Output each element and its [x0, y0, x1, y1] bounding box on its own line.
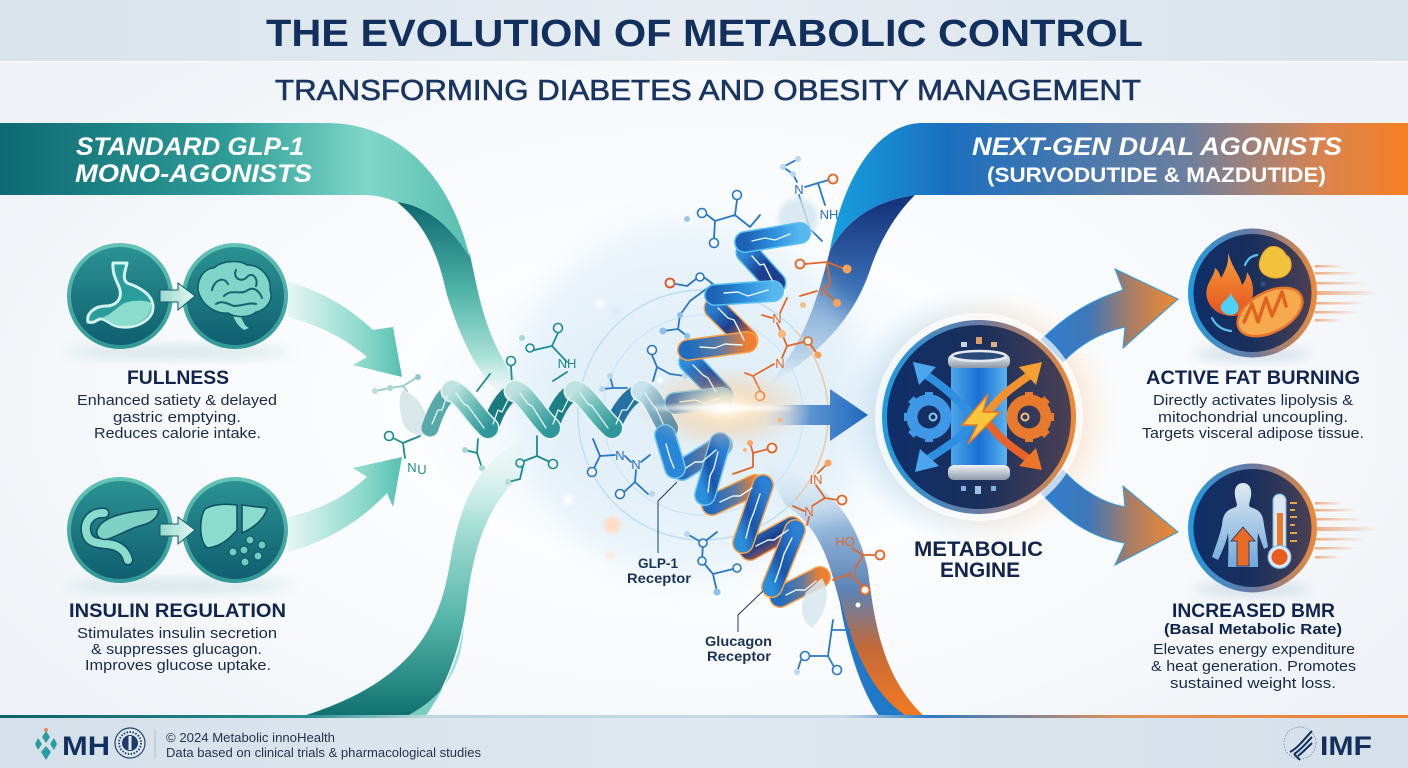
text: active fat burning: Directly activates lipolysis &	[1153, 393, 1353, 409]
icon: lightning bolt	[962, 394, 1000, 444]
icon: increased BMR	[1188, 464, 1378, 595]
molecules: orange side chains: N	[804, 504, 814, 519]
engine glow halo	[839, 289, 1120, 545]
ribbon: right banner with flowing ribbons	[765, 123, 1408, 717]
icon: flame	[1206, 252, 1253, 316]
molecules: teal side chains: NH	[558, 356, 576, 371]
molecules: blue side chains: N	[794, 182, 804, 197]
right banner heading: (SURVODUTIDE & MAZDUTIDE)	[987, 164, 1326, 187]
label: metabolic engine	[914, 538, 1043, 582]
icon: active fat burning	[1188, 228, 1378, 360]
text: active fat burning: Targets visceral adipose tissue.	[1142, 426, 1364, 442]
footer credits: Data based on clinical trials & pharmacological studies	[166, 746, 481, 760]
diagonal strands	[690, 252, 775, 395]
footer credits	[166, 731, 481, 760]
band outlines	[675, 233, 800, 403]
icon: liver with cells	[201, 504, 267, 566]
molecules: orange side chains: N	[820, 284, 830, 299]
icon: arrow between pancreas and liver	[160, 517, 195, 544]
footer	[0, 715, 1408, 768]
molecules: blue side chains: NH	[820, 207, 838, 222]
arrow: engine to increased BMR	[1041, 470, 1178, 565]
text: increased BMR	[1151, 601, 1356, 692]
title: THE EVOLUTION OF METABOLIC CONTROL	[266, 13, 1143, 55]
icon: pancreas	[86, 509, 158, 560]
text: active fat burning	[1142, 368, 1364, 442]
molecules: orange side chains: N	[772, 311, 782, 326]
molecules: teal side chains: N	[407, 460, 417, 475]
icon: arrow between stomach and brain	[160, 283, 195, 310]
text: increased BMR: (Basal Metabolic Rate)	[1164, 621, 1342, 638]
text: fullness: Enhanced satiety & delayed	[77, 393, 277, 409]
molecules: teal side chains	[372, 324, 576, 485]
icon: metabolic engine	[875, 313, 1083, 521]
text: increased BMR: & heat generation. Promotes	[1151, 659, 1356, 675]
text: active fat burning: ACTIVE FAT BURNING	[1146, 368, 1360, 389]
text: insulin regulation: & suppresses glucagon.	[91, 642, 262, 658]
helix: teal GLP-1 peptide	[400, 390, 668, 435]
left banner heading: MONO-AGONISTS	[75, 160, 312, 188]
leader line and label: GLP-1 receptor: Receptor	[627, 570, 692, 586]
text: fullness	[77, 368, 277, 442]
background glow and rings behind receptors	[515, 220, 865, 580]
text: increased BMR: Elevates energy expenditure	[1153, 642, 1355, 658]
icon: right gear	[1012, 392, 1054, 442]
header band	[0, 0, 1408, 62]
icon: insulin regulation pancreas to liver	[66, 477, 290, 592]
arrow: receptors to metabolic engine	[763, 389, 868, 441]
leader line and label: glucagon receptor: Receptor	[707, 648, 772, 664]
subtitle: TRANSFORMING DIABETES AND OBESITY MANAGEMENT	[275, 75, 1141, 107]
molecules: blue side chains	[588, 156, 850, 675]
left banner heading	[75, 133, 312, 188]
text: fullness: Reduces calorie intake.	[94, 426, 261, 442]
icon: mitochondrion	[1230, 278, 1310, 346]
icon: crossing arrows	[913, 362, 1042, 472]
ribbon: left banner with flowing ribbons	[0, 123, 527, 717]
icon: battery cylinder	[948, 337, 1010, 494]
helix: upper GLP-1 receptor	[675, 198, 818, 403]
left banner heading: STANDARD GLP-1	[76, 133, 304, 161]
leader line and label: glucagon receptor	[705, 591, 772, 664]
icon: left gear	[904, 392, 946, 442]
band outlines	[682, 445, 820, 597]
icon: fat droplet	[1259, 247, 1291, 278]
icon: small arrows	[1212, 255, 1257, 331]
molecules: orange side chains: N	[847, 568, 857, 583]
label: metabolic engine: METABOLIC	[914, 538, 1043, 561]
text: insulin regulation: Stimulates insulin secretion	[77, 626, 277, 642]
molecules: orange side chains: IN	[810, 472, 822, 487]
arrow: engine to active fat burning	[1041, 269, 1178, 362]
text: insulin regulation	[69, 601, 286, 674]
logo: MH mark	[35, 728, 110, 761]
leader line and label: GLP-1 receptor	[627, 482, 692, 586]
right banner heading	[972, 133, 1342, 187]
icon: thermometer	[1268, 494, 1297, 568]
helix: lower glucagon receptor	[665, 435, 827, 628]
leader line and label: GLP-1 receptor: GLP-1	[638, 555, 678, 571]
central energy flare	[563, 300, 812, 559]
text: increased BMR: sustained weight loss.	[1170, 676, 1336, 692]
molecules: orange side chains: HO	[835, 534, 855, 549]
light strands	[675, 233, 800, 403]
arrow: fullness to peptide	[288, 282, 402, 377]
arrow: insulin regulation to peptide	[288, 457, 402, 552]
text: fullness: gastric emptying.	[113, 410, 241, 426]
molecules: blue side chains: N	[631, 457, 641, 472]
strand outlines	[690, 252, 775, 395]
leader line and label: glucagon receptor: Glucagon	[705, 633, 772, 649]
text: insulin regulation: Improves glucose uptake.	[85, 658, 271, 674]
footer credits: © 2024 Metabolic innoHealth	[166, 731, 335, 745]
molecules: orange side chains: N	[775, 356, 785, 371]
label: metabolic engine: ENGINE	[940, 559, 1020, 582]
logo: IMF	[1284, 727, 1372, 761]
icon: human body	[1212, 483, 1268, 567]
logo: MH mark: MH	[62, 731, 110, 761]
text: fullness: FULLNESS	[127, 368, 229, 389]
icon: fullness stomach to brain	[66, 243, 290, 358]
bands	[682, 445, 820, 597]
icon: brain	[198, 262, 271, 330]
text: insulin regulation: INSULIN REGULATION	[69, 601, 286, 622]
vertical strand outlines	[665, 435, 795, 587]
icon: stomach	[88, 263, 153, 327]
right banner heading: NEXT-GEN DUAL AGONISTS	[972, 133, 1342, 161]
vertical strands	[665, 435, 795, 587]
text: increased BMR: INCREASED BMR	[1172, 601, 1335, 622]
molecules: blue side chains: N	[615, 448, 625, 463]
logo: IMF: IMF	[1320, 731, 1372, 761]
text: active fat burning: mitochondrial uncoupling.	[1158, 410, 1348, 426]
molecules: teal side chains: U	[417, 462, 427, 477]
logo: seal	[115, 728, 145, 758]
molecules: orange side chains	[733, 260, 884, 608]
